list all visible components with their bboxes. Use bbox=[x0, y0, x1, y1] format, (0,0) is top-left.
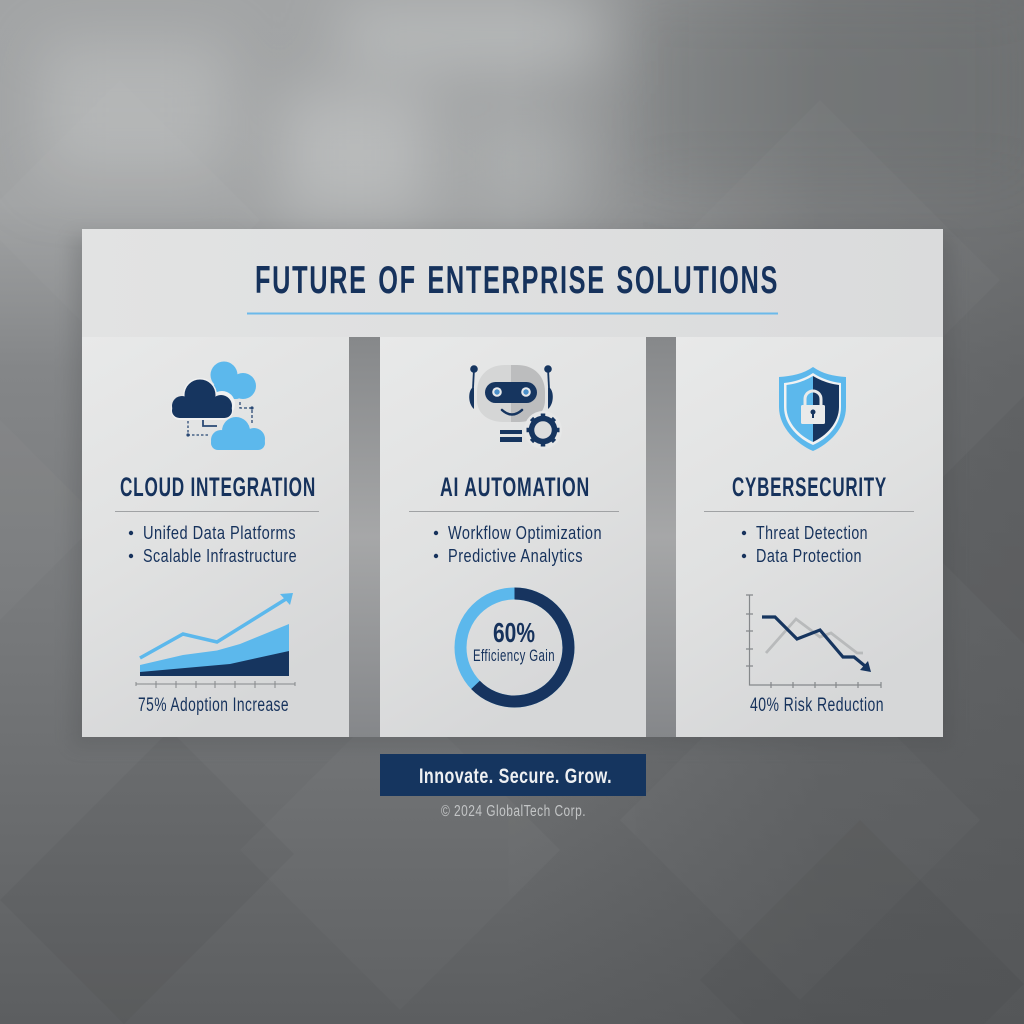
bullet list: Scalable Infrastructure bbox=[143, 545, 297, 566]
heading: AI AUTOMATION bbox=[440, 472, 590, 502]
bullet list: Unifed Data Platforms bbox=[143, 522, 296, 543]
panel: cybersecurity bbox=[676, 337, 943, 737]
donut chart bbox=[460, 594, 568, 702]
bullet list: Predictive Analytics bbox=[448, 545, 583, 566]
panel: cloud integration bbox=[82, 337, 349, 737]
heading: CLOUD INTEGRATION bbox=[120, 472, 316, 502]
bullet list bbox=[129, 522, 297, 566]
bullet list: Workflow Optimization bbox=[448, 522, 602, 543]
heading: CYBERSECURITY bbox=[732, 472, 887, 502]
gaps between cards bbox=[349, 337, 676, 737]
header panel bbox=[82, 229, 943, 337]
chart label: 40% Risk Reduction bbox=[750, 695, 884, 716]
bullet list bbox=[742, 522, 868, 566]
donut label: Efficiency Gain bbox=[473, 646, 555, 665]
bullet list: Data Protection bbox=[756, 545, 862, 566]
line chart bbox=[746, 595, 881, 688]
panel: ai automation bbox=[380, 337, 646, 737]
tagline banner: Innovate. Secure. Grow. bbox=[419, 765, 612, 788]
bullet list: Threat Detection bbox=[756, 522, 868, 543]
icon: connected clouds bbox=[171, 362, 265, 450]
icon: robot with gear bbox=[469, 365, 562, 449]
donut value: 60% bbox=[493, 617, 535, 648]
tagline banner bbox=[380, 754, 646, 796]
bullet list bbox=[434, 522, 602, 566]
icon: shield with lock bbox=[779, 367, 846, 451]
chart label: 75% Adoption Increase bbox=[138, 695, 289, 716]
area chart bbox=[136, 593, 295, 688]
copyright: © 2024 GlobalTech Corp. bbox=[441, 803, 586, 820]
